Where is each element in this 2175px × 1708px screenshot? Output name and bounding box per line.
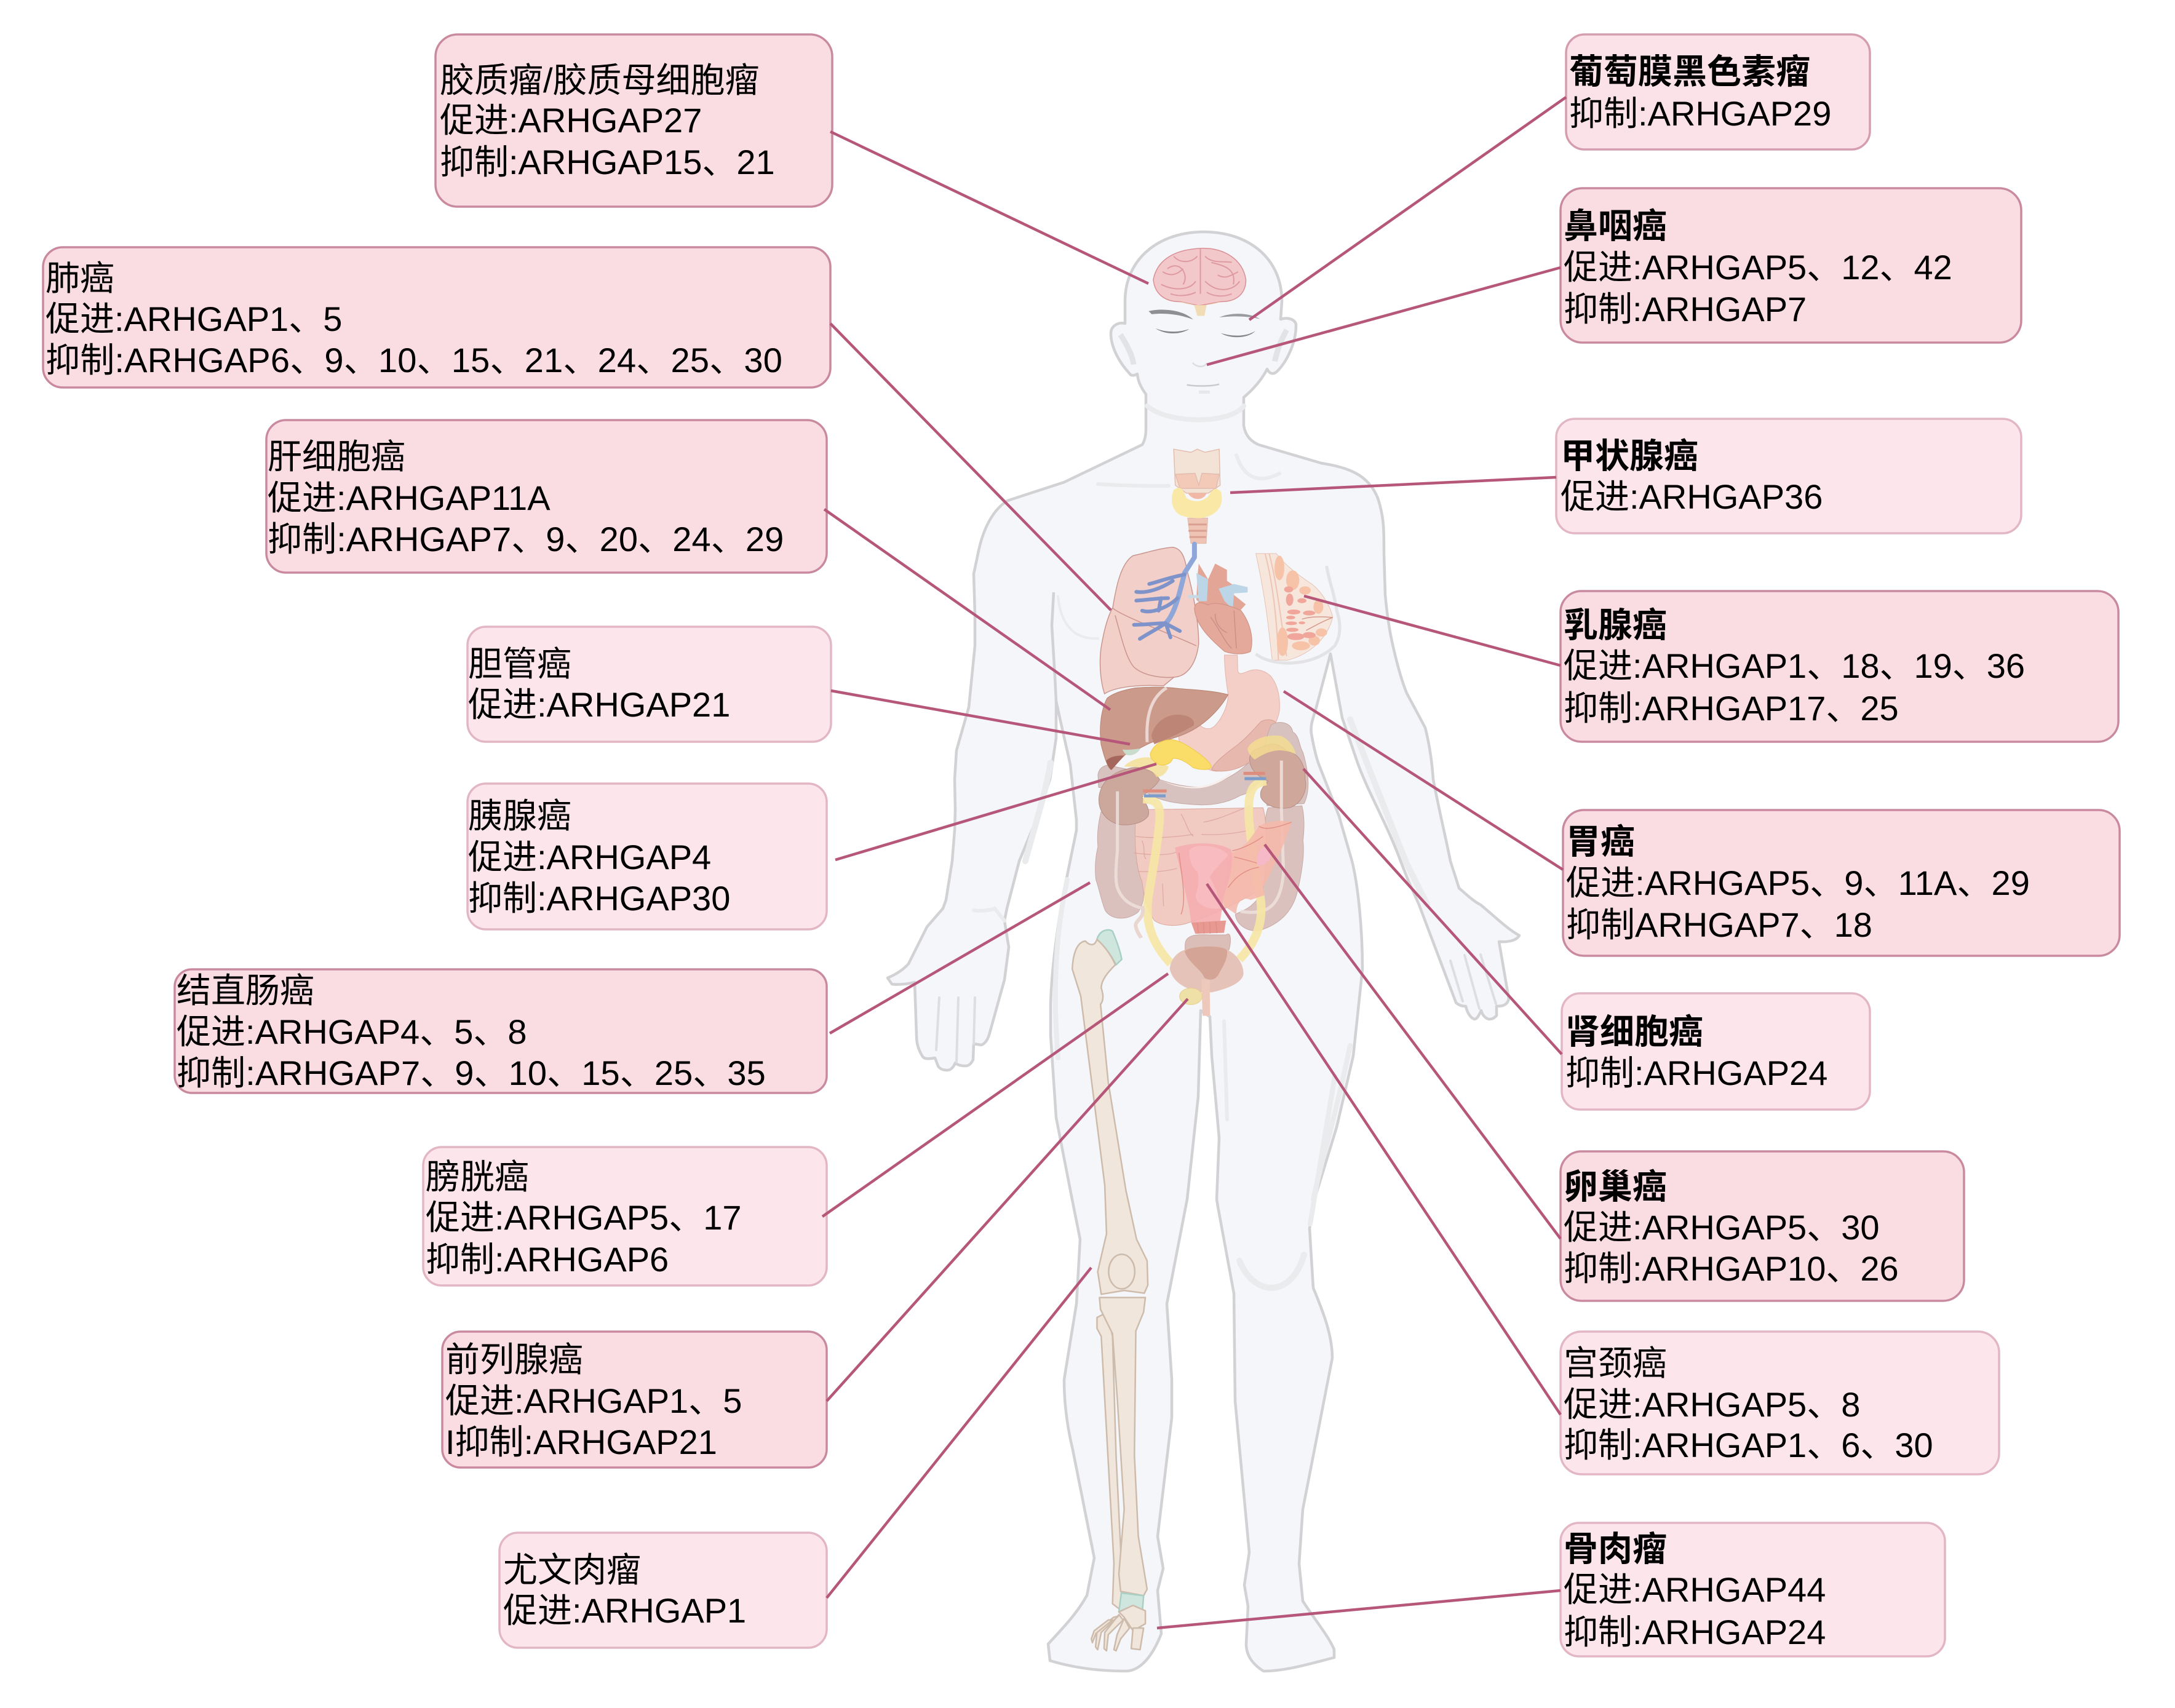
panel: osteosarcoma	[1561, 1523, 1945, 1656]
armpit crease	[1052, 592, 1056, 701]
box	[435, 34, 832, 207]
inhibit list: 抑制:ARHGAP7、9、10、15、25、35	[177, 1054, 766, 1092]
box	[423, 1147, 827, 1285]
icon: foot bones	[1091, 1605, 1145, 1651]
inhibit list: 抑制:ARHGAP29	[1569, 94, 1831, 133]
panel: Ewing sarcoma	[499, 1533, 827, 1648]
heading: 肺癌	[46, 259, 114, 298]
arrow: liver	[824, 509, 1110, 710]
panel: breast cancer	[1561, 591, 2118, 742]
box	[467, 627, 831, 742]
panel: lung cancer	[43, 247, 830, 387]
promote list: 促进:ARHGAP44	[1564, 1570, 1826, 1609]
box	[1561, 188, 2021, 343]
heading: 甲状腺癌	[1561, 437, 1698, 475]
icon: face	[1120, 309, 1287, 392]
inhibit list: 抑制:ARHGAP30	[468, 879, 730, 918]
inhibit list: 抑制:ARHGAP7	[1564, 290, 1807, 328]
icon: femur	[1072, 939, 1148, 1294]
icon: ascending colon	[1095, 812, 1143, 918]
box	[442, 1332, 827, 1468]
chest organs group	[1100, 544, 1252, 694]
icon: lungs	[1100, 547, 1199, 694]
icon: colon inner lines	[1116, 761, 1284, 912]
arrow: cervix	[1207, 884, 1561, 1415]
panel: colorectal cancer	[175, 969, 827, 1093]
icon: renal vessels	[1143, 773, 1266, 796]
inhibit list: 抑制:ARHGAP1、6、30	[1564, 1426, 1933, 1464]
heading: 鼻咽癌	[1564, 207, 1667, 245]
promote list: 促进:ARHGAP11A	[268, 479, 551, 517]
arrow: prostate	[827, 999, 1188, 1401]
inhibit list: 抑制:ARHGAP6	[426, 1240, 669, 1279]
icon: rectum	[1185, 934, 1230, 953]
icon: uterus and ovary	[1175, 821, 1292, 934]
inhibit list: 抑制:ARHGAP24	[1564, 1613, 1826, 1651]
heading: 胰腺癌	[468, 796, 571, 835]
icon: stomach	[1179, 655, 1279, 771]
icon: adrenal glands	[1124, 736, 1296, 777]
promote list: 促进:ARHGAP21	[468, 685, 730, 724]
promote list: 促进:ARHGAP1、5	[445, 1381, 742, 1420]
panel: cervical cancer	[1561, 1332, 1999, 1474]
arrow: osteosarcoma	[1157, 1591, 1561, 1628]
icon: fibula	[1097, 1312, 1123, 1609]
heading: 肝细胞癌	[268, 437, 405, 476]
arrow: uveal melanoma	[1249, 97, 1566, 320]
inhibit list: 抑制:ARHGAP6、9、10、15、21、24、25、30	[46, 341, 782, 379]
icon: left kidney	[1099, 768, 1159, 825]
icon: bronchi	[1134, 544, 1195, 639]
panel: pancreatic cancer	[467, 784, 827, 929]
inhibit list: 抑制:ARHGAP15、21	[440, 143, 775, 181]
icon: upper descending colon	[1263, 723, 1308, 806]
arrow: Ewing sarcoma	[827, 1268, 1091, 1598]
heading: 胶质瘤/胶质母细胞瘤	[440, 61, 760, 100]
arrow: thyroid	[1230, 477, 1556, 493]
heading: 结直肠癌	[177, 971, 314, 1010]
panel: nasopharyngeal carcinoma	[1561, 188, 2021, 343]
icon: transverse colon	[1098, 763, 1263, 805]
icon: bladder	[1170, 947, 1244, 1016]
icon: breast	[1256, 554, 1340, 663]
panel: cholangiocarcinoma	[467, 627, 831, 742]
panel: thyroid cancer	[1556, 419, 2021, 533]
panel: prostate cancer	[442, 1332, 827, 1468]
arrow: nasopharyngeal	[1207, 268, 1561, 365]
box	[499, 1533, 827, 1648]
panel: gastric cancer	[1563, 810, 2120, 956]
icon: femoral head cartilage	[1097, 930, 1122, 965]
box	[1561, 1332, 1999, 1474]
promote list: 促进:ARHGAP5、9、11A、29	[1566, 864, 2030, 902]
box	[1556, 419, 2021, 533]
promote list: 促进:ARHGAP27	[440, 101, 702, 140]
icon: gallbladder	[1123, 749, 1140, 755]
icon: right kidney	[1250, 744, 1306, 808]
arrow: lung	[830, 324, 1111, 610]
heading: 宫颈癌	[1564, 1344, 1667, 1383]
inhibit list: 抑制:ARHGAP10、26	[1564, 1249, 1899, 1288]
box	[175, 969, 827, 1093]
arrow: colorectal	[830, 883, 1090, 1033]
arrow: stomach	[1284, 691, 1563, 870]
box	[43, 247, 830, 387]
inhibit list: I抑制:ARHGAP21	[445, 1423, 717, 1461]
icon: appendix	[1135, 906, 1143, 938]
inhibit list: 抑制:ARHGAP7、9、20、24、29	[268, 520, 784, 558]
panel: uveal melanoma	[1566, 34, 1870, 149]
arrow: bile duct	[831, 691, 1130, 744]
inhibit list: 抑制:ARHGAP17、25	[1564, 689, 1899, 728]
promote list: 促进:ARHGAP5、30	[1564, 1208, 1880, 1247]
box	[1562, 993, 1870, 1110]
icon: tibia	[1099, 1298, 1147, 1595]
heading: 骨肉瘤	[1564, 1530, 1667, 1568]
heading: 胆管癌	[468, 645, 571, 683]
arrow: ovary	[1265, 844, 1561, 1239]
icon: small intestine	[1134, 806, 1266, 926]
body shading	[974, 406, 1427, 1288]
heading: 尤文肉瘤	[503, 1551, 641, 1589]
heading: 膀胱癌	[426, 1158, 529, 1196]
pelvic organs group	[1170, 934, 1244, 1016]
box	[266, 420, 827, 573]
icon: heart	[1188, 563, 1252, 654]
arrow: pancreas	[835, 764, 1156, 860]
panel: bladder cancer	[423, 1147, 827, 1285]
promote list: 促进:ARHGAP5、17	[426, 1198, 742, 1237]
promote list: 促进:ARHGAP5、8	[1564, 1385, 1860, 1424]
heading: 乳腺癌	[1564, 606, 1667, 645]
promote list: 促进:ARHGAP4、5、8	[177, 1012, 527, 1051]
arrow: kidney	[1303, 769, 1562, 1054]
promote list: 促进:ARHGAP4	[468, 838, 711, 876]
face and neck organs group	[1120, 248, 1287, 543]
promote list: 促进:ARHGAP1、18、19、36	[1564, 646, 2025, 685]
icon: pancreas	[1150, 740, 1211, 769]
icon: larynx and trachea	[1174, 449, 1220, 543]
inhibit list: 抑制ARHGAP7、18	[1566, 905, 1872, 944]
box	[1561, 1523, 1945, 1656]
arrow: glioma	[830, 132, 1148, 284]
body silhouette	[888, 232, 1519, 1671]
box	[1566, 34, 1870, 149]
icon: ureters	[1143, 781, 1266, 964]
icon: thyroid	[1172, 488, 1222, 518]
icon: prostate	[1180, 988, 1202, 1004]
icon: ankle cartilage	[1119, 1593, 1143, 1612]
box	[467, 784, 827, 929]
panel: hepatocellular carcinoma	[266, 420, 827, 573]
icon: brain	[1153, 248, 1246, 316]
leg skeleton	[1072, 930, 1148, 1651]
panel: renal cell carcinoma	[1562, 993, 1870, 1110]
panel: ovarian cancer	[1561, 1151, 1964, 1301]
promote list: 促进:ARHGAP36	[1561, 477, 1823, 516]
box	[1561, 591, 2118, 742]
abdominal organs group	[1095, 655, 1308, 964]
box	[1561, 1151, 1964, 1301]
icon: descending colon	[1235, 806, 1304, 931]
heading: 肾细胞癌	[1565, 1012, 1703, 1051]
promote list: 促进:ARHGAP5、12、42	[1564, 248, 1952, 287]
arrow: bladder	[822, 974, 1168, 1217]
panel: glioma	[435, 34, 832, 207]
finger lines	[936, 955, 1496, 1062]
heading: 胃癌	[1566, 822, 1635, 861]
heading: 卵巢癌	[1564, 1167, 1667, 1206]
icon: liver	[1100, 687, 1228, 770]
inhibit list: 抑制:ARHGAP24	[1565, 1054, 1827, 1092]
promote list: 促进:ARHGAP1	[503, 1591, 746, 1630]
box	[1563, 810, 2120, 956]
heading: 葡萄膜黑色素瘤	[1569, 52, 1810, 91]
arrow: breast	[1304, 596, 1561, 665]
icon: patella	[1108, 1254, 1135, 1289]
promote list: 促进:ARHGAP1、5	[46, 300, 342, 338]
heading: 前列腺癌	[445, 1340, 583, 1379]
icon: splenic flexure	[1212, 720, 1276, 771]
